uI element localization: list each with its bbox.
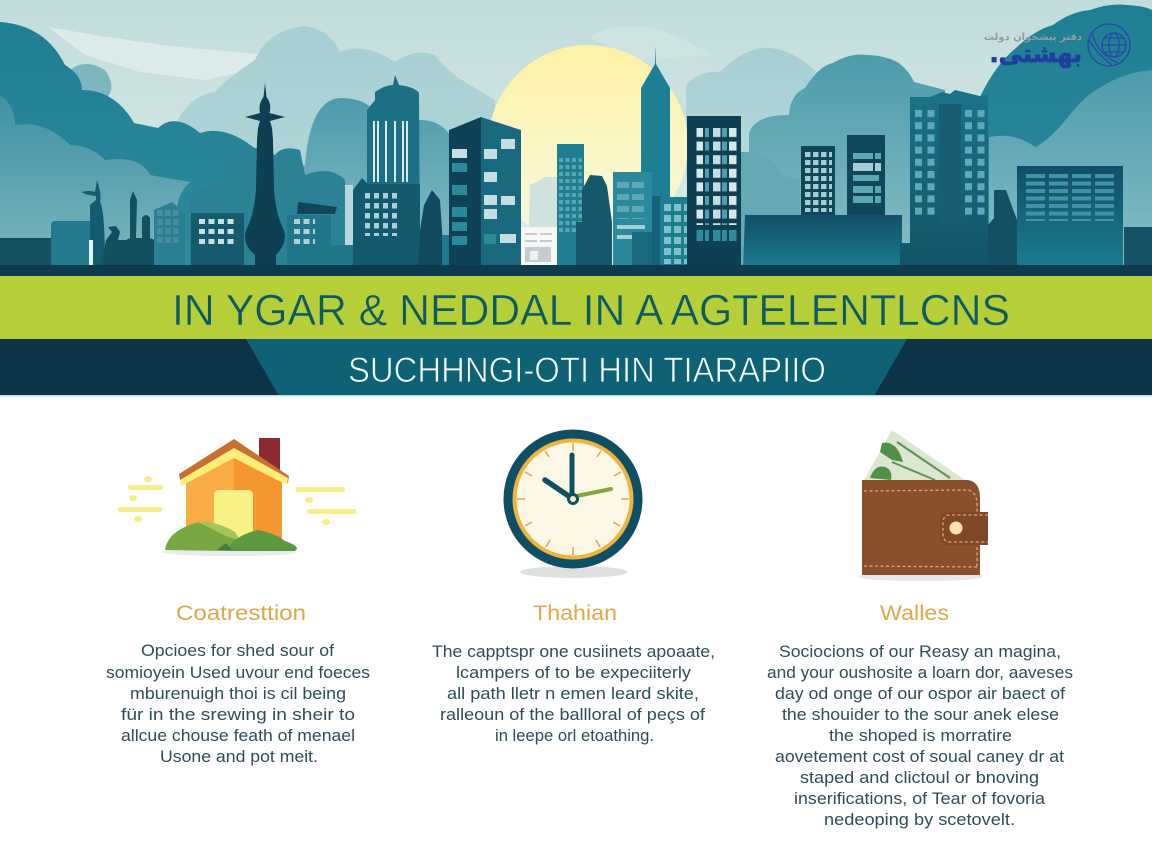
- buildings: centre left group: [287, 185, 370, 268]
- panel: column one: [106, 438, 370, 766]
- body text: somioyein Used uvour end foeces: [106, 663, 370, 682]
- body text: Usone and pot meit.: [160, 747, 318, 766]
- yellow motion lines: [118, 476, 356, 525]
- icon: house: [118, 438, 356, 556]
- faint cloud below the sun: [529, 177, 557, 227]
- building: wide tower right: [900, 90, 988, 268]
- banknotes: [864, 430, 965, 480]
- clock hands: [572, 489, 611, 497]
- panel: city skyline banner: [0, 0, 1152, 276]
- buildings: far right: [988, 166, 1152, 268]
- dark teal clouds: [0, 5, 1152, 270]
- body text: the shouider to the sour anek elese: [782, 705, 1059, 724]
- body text: day od onge of our ospor air baect of: [775, 684, 1065, 703]
- body text: [106, 641, 370, 766]
- body text: inserifications, of Tear of fovoria: [794, 789, 1046, 808]
- pale clouds: [48, 26, 820, 270]
- body text: lcampers of to be expeciiterly: [456, 663, 692, 682]
- subtitle band: [0, 339, 1152, 396]
- body text: Opcioes for shed sour of: [141, 641, 334, 660]
- main title: IN YGAR & NEDDAL IN A AGTELENTLCNS: [172, 286, 1010, 335]
- body text: The capptspr one cusiinets apoaate,: [432, 642, 715, 661]
- subtitle: SUCHHNGI-OTI HIN TIARAPIIO: [348, 351, 826, 390]
- body text: [767, 642, 1073, 829]
- panel: column two: [432, 430, 715, 745]
- body text: mburenuigh thoi is cil being: [130, 684, 346, 703]
- logo: [984, 24, 1130, 68]
- clock ticks: [517, 443, 629, 555]
- body text: aovetement cost of soual caney dr at: [775, 747, 1064, 766]
- building: dark window tower: [687, 116, 741, 268]
- buildings: left low blocks: [0, 180, 185, 268]
- building: peaked office block: [449, 117, 521, 268]
- body text: nedeoping by scetovelt.: [824, 810, 1015, 829]
- title band: [0, 276, 1152, 339]
- building: needle tower: [245, 83, 285, 272]
- panel: column three: [767, 430, 1073, 829]
- body text: allcue chouse feath of menael: [121, 726, 355, 745]
- body text: [432, 642, 715, 745]
- sun: [488, 45, 688, 245]
- body text: the shoped is morratire: [829, 726, 1012, 745]
- heading: Thahian: [533, 602, 617, 625]
- logo text: brand name: بهشتی.: [990, 40, 1082, 68]
- body text: all path lletr n emen leard skite,: [447, 684, 699, 703]
- sky background: [0, 0, 1152, 270]
- icon: clock: [504, 430, 642, 578]
- body text: ralleoun of the ballloral of peçs of: [440, 705, 705, 724]
- logo globe emblem: [1088, 24, 1130, 66]
- buildings: right twin towers and podium: [743, 135, 902, 268]
- buildings: centre right group: [557, 45, 693, 268]
- icon: wallet: [859, 430, 988, 581]
- body text: in leepe orl etoathing.: [495, 726, 654, 745]
- wallet strap: [940, 512, 988, 545]
- building: striped tall tower: [353, 75, 450, 268]
- body text: staped and clictoul or bnoving: [800, 768, 1039, 787]
- ground strip: [0, 265, 1152, 276]
- body text: für in the srewing in sheir to: [121, 705, 355, 724]
- body text: and your oushosite a loarn dor, aaveses: [767, 663, 1073, 682]
- heading: Walles: [880, 602, 949, 625]
- building: left windowed block: [191, 213, 244, 268]
- mid-tone clouds: [70, 55, 945, 270]
- white square sign: [521, 227, 557, 266]
- logo text: office name: دفتر پیشخوان دولت: [984, 32, 1082, 43]
- heading: Coatresttion: [176, 602, 306, 625]
- body text: Sociocions of our Reasy an magina,: [779, 642, 1061, 661]
